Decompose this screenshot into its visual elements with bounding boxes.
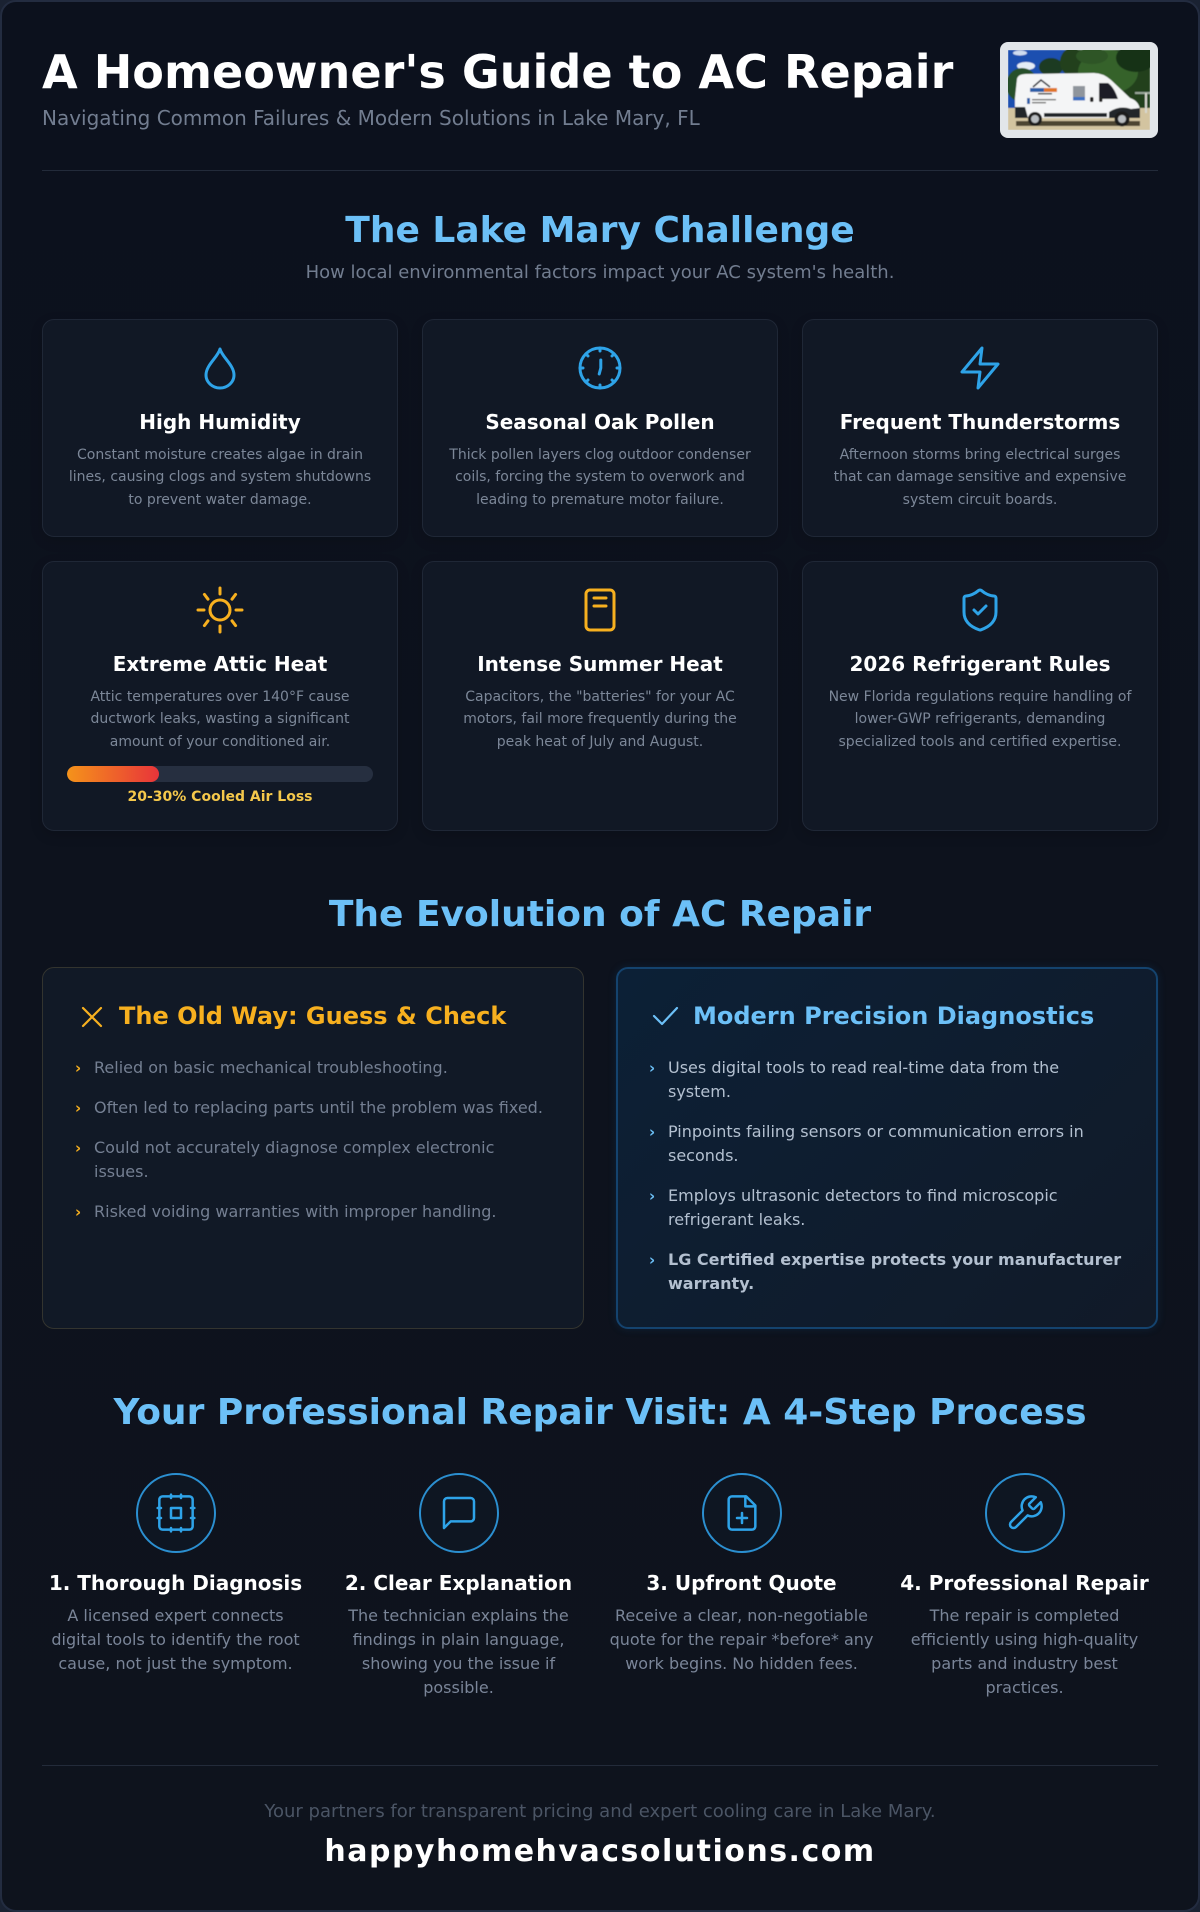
step text: digital tools to identify the root xyxy=(51,1630,300,1649)
list of old way points: Often led to replacing parts until the problem was fixed. xyxy=(94,1098,543,1117)
icon: sun xyxy=(196,586,244,634)
footer divider line xyxy=(42,1765,1158,1766)
header divider line xyxy=(42,170,1158,171)
step 2: explanation xyxy=(345,1473,572,1697)
card heading: Frequent Thunderstorms xyxy=(840,410,1120,434)
icon: gauge clock xyxy=(578,346,622,390)
panel heading: Modern Precision Diagnostics xyxy=(693,1002,1094,1030)
card text xyxy=(449,447,751,508)
card text: coils, forcing the system to overwork and xyxy=(455,469,745,485)
list of old way points: Risked voiding warranties with improper handling. xyxy=(94,1202,496,1221)
card: Seasonal Oak Pollen xyxy=(422,319,778,537)
section subheading: How local environmental factors impact your AC system's health. xyxy=(306,262,894,283)
card text: leading to premature motor failure. xyxy=(476,492,724,508)
step heading: 3. Upfront Quote xyxy=(646,1571,837,1595)
heading: 4-step process: Your Professional Repair Visit: A 4-Step Process xyxy=(113,1392,1087,1433)
footer website: happyhomehvacsolutions.com xyxy=(324,1834,876,1869)
title: A Homeowner's Guide to AC Repair xyxy=(42,45,953,99)
card: 2026 Refrigerant Rules xyxy=(802,561,1158,831)
list of modern points xyxy=(649,1058,1122,1293)
icon: capacitor battery xyxy=(584,588,616,632)
step text: Receive a clear, non-negotiable xyxy=(615,1606,868,1625)
card text: system circuit boards. xyxy=(903,492,1057,508)
panel: modern precision diagnostics: › xyxy=(649,1251,655,1269)
card text: Attic temperatures over 140°F cause xyxy=(90,689,350,705)
step 3: quote xyxy=(610,1473,873,1673)
icon: check mark xyxy=(652,1006,678,1026)
progress label: 20-30% Cooled Air Loss xyxy=(128,788,312,804)
list of old way points: issues. xyxy=(94,1162,149,1181)
card text: to prevent water damage. xyxy=(128,492,312,508)
list of old way points xyxy=(75,1058,543,1221)
card text: lower-GWP refrigerants, demanding xyxy=(855,711,1105,727)
image: service van photo xyxy=(1000,42,1158,138)
panel: modern precision diagnostics: › xyxy=(649,1123,655,1141)
icon: circuit chip xyxy=(136,1473,216,1553)
card: Frequent Thunderstorms xyxy=(802,319,1158,537)
icon: cross xyxy=(82,1006,102,1028)
footer tagline: Your partners for transparent pricing and expert cooling care in Lake Mary. xyxy=(264,1801,936,1822)
card text: New Florida regulations require handling of xyxy=(829,689,1131,705)
step text: parts and industry best xyxy=(931,1654,1118,1673)
panel: modern precision diagnostics: › xyxy=(649,1187,655,1205)
card text: that can damage sensitive and expensive xyxy=(834,469,1126,485)
card: Intense Summer Heat xyxy=(422,561,778,831)
icon: lightning bolt xyxy=(960,346,1000,390)
step text: The repair is completed xyxy=(930,1606,1119,1625)
step text xyxy=(911,1606,1138,1697)
icon: shield check xyxy=(962,588,998,632)
list of old way points: Could not accurately diagnose complex electronic xyxy=(94,1138,494,1157)
heading: The Evolution of AC Repair: The Evolution of AC Repair xyxy=(329,894,871,935)
list of modern points: refrigerant leaks. xyxy=(668,1210,805,1229)
step text xyxy=(348,1606,569,1697)
card text: amount of your conditioned air. xyxy=(110,734,330,750)
card text: Afternoon storms bring electrical surges xyxy=(840,447,1120,463)
card heading: 2026 Refrigerant Rules xyxy=(850,652,1110,676)
icon: speech bubble xyxy=(419,1473,499,1553)
step text: practices. xyxy=(985,1678,1064,1697)
step text: findings in plain language, xyxy=(353,1630,564,1649)
heading: The Lake Mary Challenge: The Lake Mary Challenge xyxy=(345,210,855,251)
card text: motors, fail more frequently during the xyxy=(463,711,737,727)
step text: efficiently using high-quality xyxy=(911,1630,1138,1649)
step 1: diagnosis xyxy=(49,1473,302,1673)
card text: Thick pollen layers clog outdoor condenser xyxy=(449,447,751,463)
step text: showing you the issue if xyxy=(362,1654,555,1673)
list of modern points: warranty. xyxy=(668,1274,754,1293)
step heading: 2. Clear Explanation xyxy=(345,1571,572,1595)
panel: modern precision diagnostics xyxy=(616,967,1158,1329)
step text: work begins. No hidden fees. xyxy=(625,1654,858,1673)
list of modern points: seconds. xyxy=(668,1146,738,1165)
card text xyxy=(829,689,1132,750)
step 4: repair xyxy=(900,1473,1149,1697)
panel: the old way xyxy=(42,967,584,1329)
icon: water drop xyxy=(204,348,236,390)
step text xyxy=(51,1606,300,1673)
panel: modern precision diagnostics: › xyxy=(649,1059,655,1077)
card text xyxy=(69,447,371,508)
progress bar xyxy=(67,766,373,782)
panel: the old way: › xyxy=(75,1099,81,1117)
step text: quote for the repair *before* any xyxy=(610,1630,873,1649)
step text xyxy=(610,1606,873,1673)
card: Extreme Attic Heat xyxy=(42,561,398,831)
card heading: Extreme Attic Heat xyxy=(113,652,327,676)
card text xyxy=(834,447,1126,508)
icon: wrench xyxy=(985,1473,1065,1553)
panel: the old way: › xyxy=(75,1203,81,1221)
card text: Capacitors, the "batteries" for your AC xyxy=(465,689,735,705)
card text: Constant moisture creates algae in drain xyxy=(77,447,363,463)
card text xyxy=(463,689,737,750)
list of modern points: Employs ultrasonic detectors to find microscopic xyxy=(668,1186,1058,1205)
card text: specialized tools and certified expertise. xyxy=(839,734,1121,750)
panel: the old way: › xyxy=(75,1139,81,1157)
card text: ductwork leaks, wasting a significant xyxy=(91,711,349,727)
step heading: 4. Professional Repair xyxy=(900,1571,1149,1595)
step text: The technician explains the xyxy=(348,1606,569,1625)
card heading: High Humidity xyxy=(139,410,301,434)
step text: possible. xyxy=(423,1678,494,1697)
panel heading: The Old Way: Guess & Check xyxy=(119,1002,506,1030)
list of modern points: LG Certified expertise protects your manufacturer xyxy=(668,1250,1121,1269)
card text xyxy=(90,689,350,750)
subtitle: Navigating Common Failures & Modern Solutions in Lake Mary, FL xyxy=(42,106,700,130)
list of modern points: Uses digital tools to read real-time data from the xyxy=(668,1058,1059,1077)
step text: cause, not just the symptom. xyxy=(58,1654,293,1673)
step heading: 1. Thorough Diagnosis xyxy=(49,1571,302,1595)
card heading: Seasonal Oak Pollen xyxy=(485,410,715,434)
card text: lines, causing clogs and system shutdowns xyxy=(69,469,371,485)
icon: document with plus xyxy=(702,1473,782,1553)
list of old way points: Relied on basic mechanical troubleshooting. xyxy=(94,1058,448,1077)
panel: the old way: › xyxy=(75,1059,81,1077)
list of modern points: system. xyxy=(668,1082,731,1101)
step text: A licensed expert connects xyxy=(67,1606,284,1625)
card text: peak heat of July and August. xyxy=(497,734,703,750)
card: High Humidity xyxy=(42,319,398,537)
list of modern points: Pinpoints failing sensors or communication errors in xyxy=(668,1122,1084,1141)
card heading: Intense Summer Heat xyxy=(477,652,723,676)
